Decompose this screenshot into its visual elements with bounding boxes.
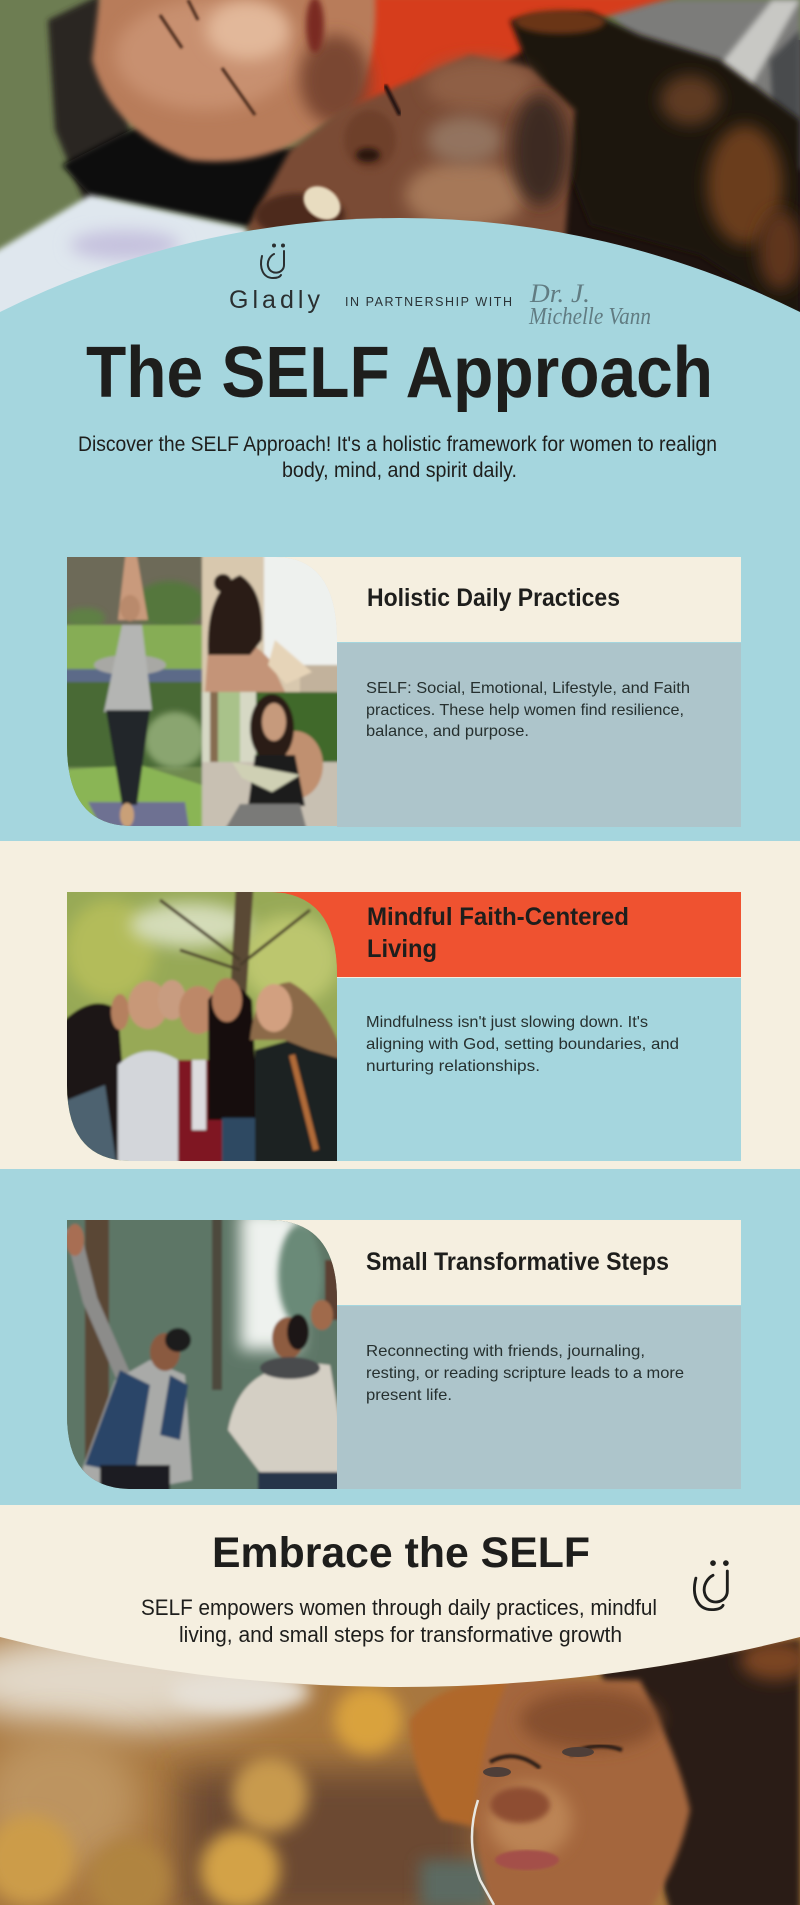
body text: balance, and purpose. [366, 723, 529, 740]
icon: Gladly mark [694, 1562, 727, 1610]
heading band [200, 557, 741, 642]
cream band background [0, 841, 800, 1169]
body text [366, 1014, 679, 1075]
photo: women pointing in forest [67, 1220, 337, 1489]
heading band [200, 892, 741, 977]
heading: Holistic Daily Practices [367, 584, 620, 612]
partnership label: IN PARTNERSHIP WITH [345, 295, 512, 309]
logo: Gladly [229, 244, 320, 314]
signature: Dr. J. [529, 279, 590, 308]
closing text [141, 1595, 657, 1647]
body text [366, 680, 690, 740]
body text: Mindfulness isn't just slowing down. It's [366, 1014, 648, 1031]
body text: aligning with God, setting boundaries, and [366, 1036, 679, 1053]
photo collage: yoga and reading [67, 557, 337, 826]
body text: practices. These help women find resilience, [366, 702, 684, 719]
closing heading: Embrace the SELF [212, 1529, 590, 1577]
body text [366, 1343, 684, 1404]
heading [367, 903, 629, 963]
intro text: body, mind, and spirit daily. [282, 459, 517, 482]
icon: Gladly mark [261, 244, 284, 278]
body text: Reconnecting with friends, journaling, [366, 1343, 645, 1360]
heading band [200, 1220, 741, 1305]
body text: nurturing relationships. [366, 1058, 540, 1075]
closing text: SELF empowers women through daily practices, mindful [141, 1595, 657, 1620]
title: The SELF Approach [86, 333, 713, 413]
panel: small transformative steps [67, 1220, 741, 1489]
heading: Mindful Faith-Centered [367, 903, 629, 931]
signature [528, 279, 651, 330]
heading: Living [367, 935, 437, 963]
body text: resting, or reading scripture leads to a more [366, 1365, 684, 1382]
panel: holistic daily practices [60, 550, 741, 835]
closing text: living, and small steps for transformative growth [179, 1622, 622, 1647]
panel: mindful faith-centered living [67, 892, 741, 1161]
photo: smiling woman [0, 1620, 800, 1905]
body band [337, 978, 741, 1161]
wordmark: Gladly [229, 286, 320, 314]
teal arc header panel [0, 218, 800, 841]
signature: Michelle Vann [528, 304, 651, 330]
cream closing panel [0, 1505, 800, 1687]
body band [337, 1306, 741, 1489]
intro text: Discover the SELF Approach! It's a holistic framework for women to realign [78, 433, 717, 456]
body text: SELF: Social, Emotional, Lifestyle, and Faith [366, 680, 690, 697]
photo: group of women laughing [67, 892, 337, 1161]
body text: present life. [366, 1387, 452, 1404]
photo: two women laughing [0, 0, 800, 330]
heading: Small Transformative Steps [366, 1248, 669, 1276]
body band [337, 643, 741, 827]
intro text [78, 433, 717, 482]
